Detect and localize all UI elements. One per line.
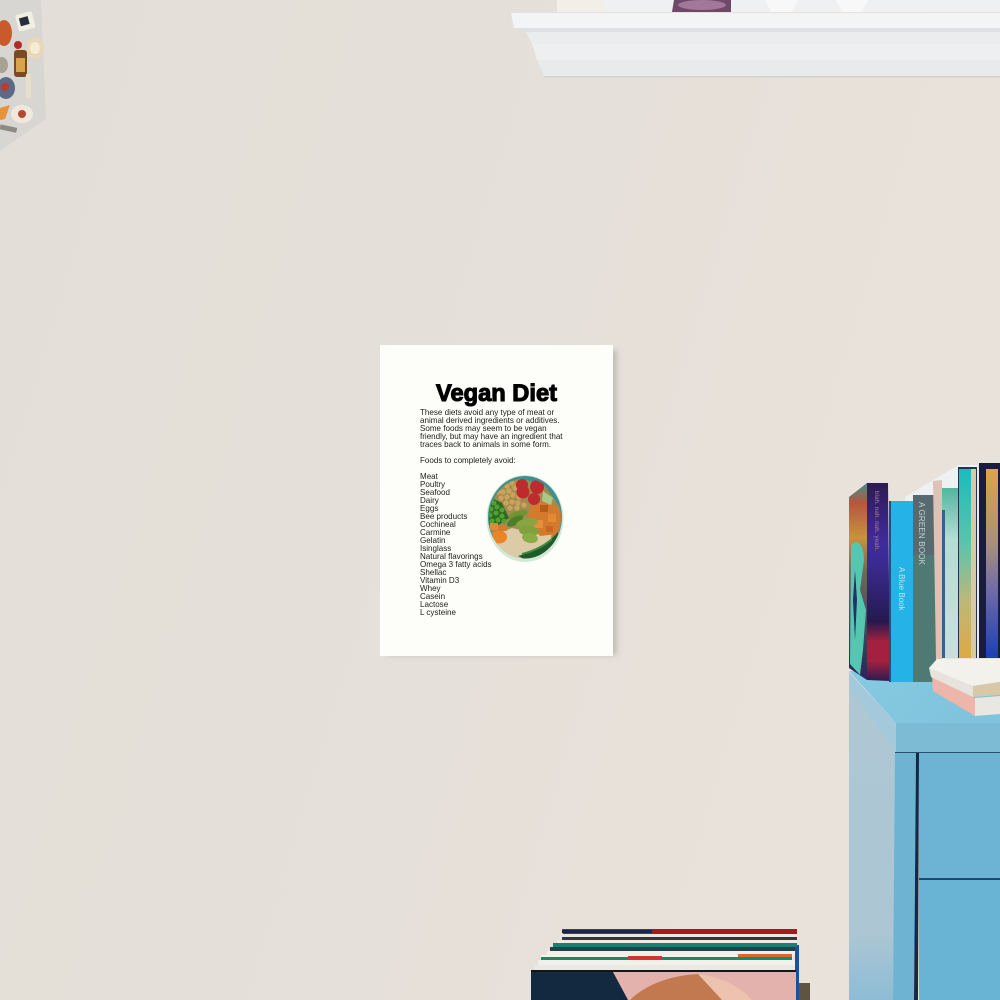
blue cabinet <box>849 671 1000 1000</box>
pink book <box>933 480 942 660</box>
foods to avoid list: Bee products <box>420 512 467 521</box>
foods to avoid list: Meat <box>420 472 439 481</box>
dark gradient book <box>979 463 1000 658</box>
upper drawer <box>919 753 1000 878</box>
foods to avoid list: L cysteine <box>420 608 456 617</box>
foods to avoid list: Whey <box>420 584 441 593</box>
foods to avoid list: Poultry <box>420 480 445 489</box>
teal book <box>958 467 977 658</box>
blue book: A Blue Book <box>897 567 906 612</box>
poster: vegan diet <box>380 345 613 656</box>
intro text: friendly, but may have an ingredient that <box>420 432 563 441</box>
list heading: Foods to completely avoid: <box>420 456 516 465</box>
vinyl records crate <box>531 929 810 1000</box>
front record cover <box>531 972 796 1000</box>
dark patterned book <box>849 483 890 681</box>
shelf with decor <box>511 0 1000 78</box>
foods to avoid list: Isinglass <box>420 544 451 553</box>
cucumber <box>542 491 553 505</box>
intro text: Some foods may seem to be vegan <box>420 424 547 433</box>
foods to avoid list: Eggs <box>420 504 438 513</box>
cabinet post <box>893 753 916 1000</box>
foods to avoid list: Gelatin <box>420 536 446 545</box>
tomatoes <box>516 479 544 505</box>
carrot slices <box>490 523 507 544</box>
cabinet gap <box>914 753 919 1000</box>
intro text: traces back to animals in some form. <box>420 440 551 449</box>
food base <box>488 478 562 558</box>
foods to avoid list: Omega 3 fatty acids <box>420 560 492 569</box>
foods to avoid list: Natural flavorings <box>420 552 483 561</box>
peas <box>489 499 508 526</box>
title: Vegan Diet <box>436 380 557 407</box>
foods to avoid list: Seafood <box>420 488 450 497</box>
pennant with enamel pins <box>0 0 46 151</box>
dark patterned book: blah. nah. nah. yeah. <box>873 491 879 551</box>
quinoa <box>492 528 552 558</box>
icon: food bowl <box>486 475 564 562</box>
chickpeas <box>495 480 527 511</box>
foods to avoid list: Shellac <box>420 568 446 577</box>
pale book <box>942 488 959 658</box>
poster shadow <box>387 350 617 655</box>
white bookend <box>905 465 978 658</box>
lower drawer <box>919 880 1000 1000</box>
foods to avoid list: Lactose <box>420 600 449 609</box>
green book: A GREEN BOOK <box>917 502 926 566</box>
poster sheet <box>380 345 613 656</box>
greens <box>518 532 558 558</box>
foods to avoid list: Casein <box>420 592 445 601</box>
foods to avoid list: Cochineal <box>420 520 456 529</box>
cabinet top front edge <box>896 723 1000 752</box>
cabinet side <box>849 672 896 1000</box>
books <box>849 463 1000 716</box>
green book <box>913 495 936 682</box>
intro text: animal derived ingredients or additives. <box>420 416 560 425</box>
foods to avoid list: Carmine <box>420 528 451 537</box>
foods to avoid list: Vitamin D3 <box>420 576 460 585</box>
avocado <box>507 510 539 544</box>
blue book <box>889 501 913 682</box>
intro text: These diets avoid any type of meat or <box>420 408 555 417</box>
foods to avoid list: Dairy <box>420 496 439 505</box>
sweet potato <box>528 500 562 536</box>
cabinet top <box>849 671 1000 723</box>
intro text <box>420 408 563 449</box>
stacked white books <box>929 659 1000 716</box>
foods to avoid list <box>420 472 492 617</box>
